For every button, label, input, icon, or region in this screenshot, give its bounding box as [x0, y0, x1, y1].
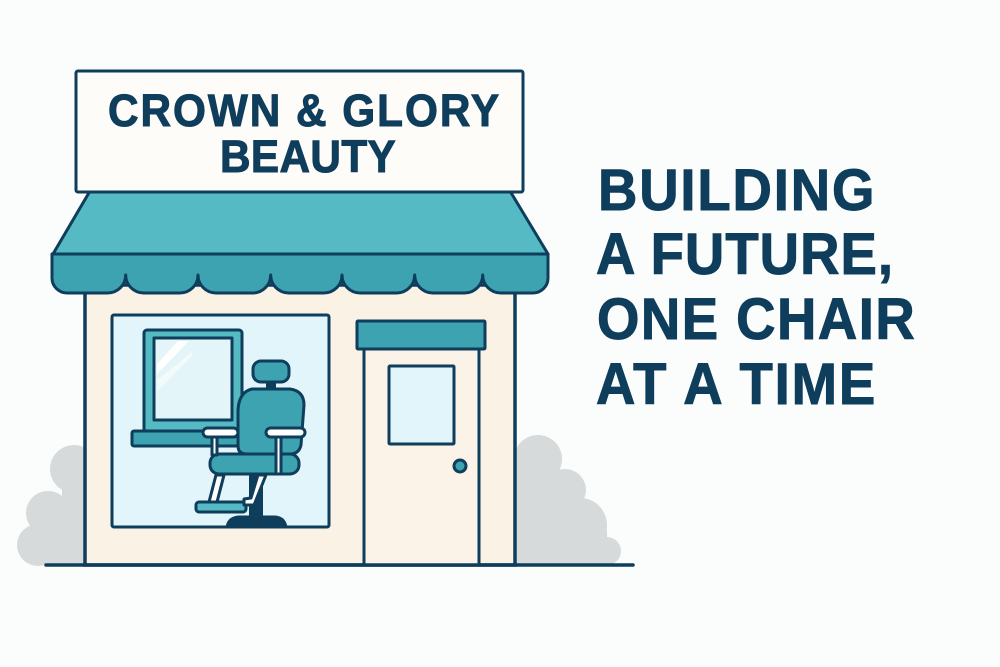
headline line 4: AT A TIME [596, 351, 875, 416]
ground line [46, 563, 633, 567]
footrest link [244, 475, 266, 505]
left arm support [212, 436, 217, 455]
sign text: line 1: CROWN & GLORY [108, 86, 499, 136]
door header [357, 321, 485, 349]
awning scalloped valance [52, 254, 548, 293]
headrest [253, 361, 289, 382]
chair back [238, 389, 304, 454]
counter shelf [132, 431, 238, 446]
chair base [227, 517, 286, 527]
door panel [364, 348, 479, 565]
door [357, 321, 485, 565]
sign text: line 2: BEAUTY [220, 132, 396, 182]
awning [52, 191, 548, 293]
headline line 3: ONE CHAIR [597, 286, 915, 351]
salon chair [196, 361, 305, 527]
mirror glass [154, 338, 232, 420]
door window [389, 366, 454, 444]
headline line 1: BUILDING [598, 157, 874, 222]
awning top canopy [53, 191, 548, 254]
headrest neck [266, 381, 276, 391]
footrest [196, 502, 246, 512]
left armrest [203, 428, 238, 437]
bush: right [514, 435, 621, 565]
window glass [112, 315, 329, 527]
bush: left [17, 445, 98, 566]
right armrest [266, 428, 305, 437]
chair post [249, 474, 263, 519]
sign board [76, 71, 523, 192]
seat [210, 454, 299, 474]
mirror glare [157, 341, 192, 392]
front leg [209, 475, 224, 502]
shop window [112, 315, 329, 527]
shop sign [76, 71, 523, 192]
right arm support [276, 436, 281, 474]
headline line 2: A FUTURE, [596, 221, 893, 286]
mirror frame [144, 330, 242, 432]
door knob [454, 460, 466, 472]
headline [596, 157, 915, 416]
shop building wall [85, 285, 515, 565]
